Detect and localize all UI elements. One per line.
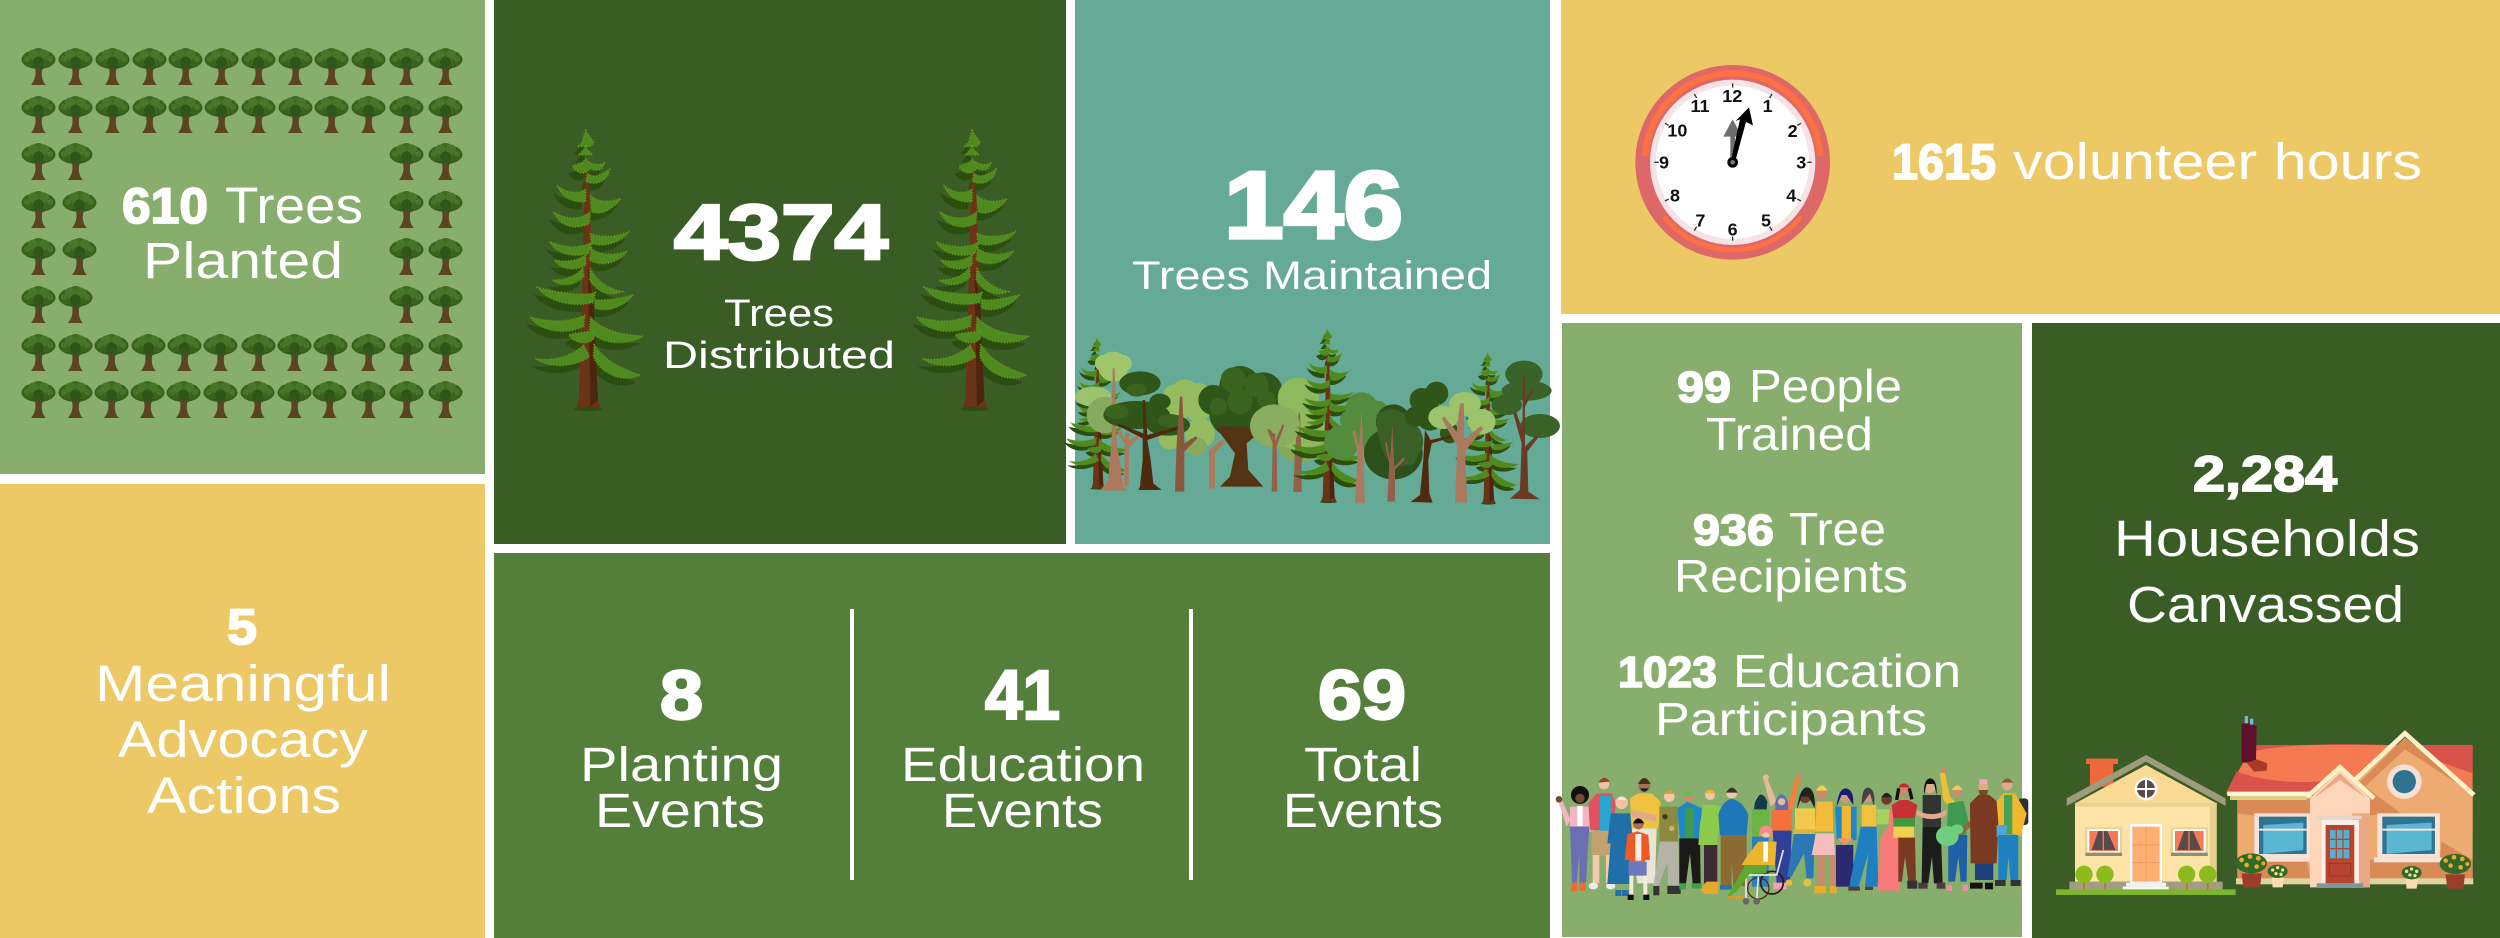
stat: 8 planting events: Planting: [580, 739, 783, 792]
text: 1615 volunteer hours: [1892, 133, 2422, 190]
text: 146 Trees Maintained: 146: [1224, 152, 1403, 259]
text: 2,284 Households Canvassed: 2,284: [2193, 446, 2337, 502]
text: 5 Meaningful Advocacy Actions: Meaningful: [95, 655, 391, 712]
icon: small yellow house: [2056, 755, 2236, 895]
text: 146 Trees Maintained: [1132, 152, 1492, 298]
icon: wall clock: 5: [1761, 210, 1771, 230]
illustration: two houses: [2056, 716, 2474, 895]
text: 2,284 Households Canvassed: [2114, 446, 2420, 633]
icon: wall clock: 4: [1786, 186, 1796, 206]
stat: 69 total events: Events: [1283, 785, 1443, 838]
icon: wall clock: 6: [1728, 219, 1738, 239]
icon: wall clock: [1635, 65, 1830, 260]
stat: 1023 education participants: [1618, 645, 1961, 745]
text: 5 Meaningful Advocacy Actions: Actions: [147, 767, 341, 824]
text: 610 Trees Planted: Planted: [143, 232, 343, 289]
stat: 69 total events: [1283, 656, 1443, 838]
stat: 99 people trained: People: [1749, 360, 1902, 412]
stat: 1023 education participants: Education: [1733, 645, 1961, 697]
stat: 936 tree recipients: [1674, 503, 1908, 602]
stat: 936 tree recipients: Tree: [1789, 503, 1886, 555]
text: 2,284 Households Canvassed: Households: [2114, 510, 2420, 567]
icon: wall clock: 7: [1695, 210, 1705, 230]
icon: wall clock: 8: [1670, 186, 1680, 206]
icon: right pine tree: [913, 131, 1030, 411]
panel: 610 trees planted: [0, 0, 485, 474]
stat: 69 total events: Total: [1304, 739, 1422, 792]
stat: 99 people trained: 99: [1677, 363, 1731, 412]
icon: wall clock: 10: [1667, 121, 1687, 141]
icon: left pine tree: [526, 131, 643, 411]
stat: 8 planting events: 8: [660, 656, 703, 734]
stat: 69 total events: 69: [1318, 656, 1406, 734]
text: 5 Meaningful Advocacy Actions: Advocacy: [118, 711, 369, 768]
panel: 146 trees maintained: [1065, 0, 1560, 544]
icon: wall clock: 2: [1788, 121, 1798, 141]
panel: 2,284 households canvassed: [2032, 323, 2500, 938]
text: 4374 Trees Distributed: Distributed: [663, 335, 895, 377]
panel: people: [1556, 323, 2028, 937]
panel: 1615 volunteer hours: [1561, 0, 2500, 314]
icon: wall clock: 3: [1796, 152, 1806, 172]
stat: 41 education events: 41: [985, 656, 1060, 734]
stat: 99 people trained: [1677, 360, 1902, 460]
text: 610 Trees Planted: 610: [122, 178, 208, 234]
icon: wall clock: 9: [1659, 152, 1669, 172]
icon: wall clock: 11: [1690, 96, 1709, 116]
text: 610 Trees Planted: Trees: [225, 177, 363, 234]
stat: 8 planting events: [580, 656, 783, 838]
illustration: forest row: [1065, 329, 1560, 505]
icon: wall clock: 1: [1763, 96, 1773, 116]
stat: 99 people trained: Trained: [1706, 408, 1873, 460]
text: 5 Meaningful Advocacy Actions: [95, 599, 391, 824]
text: 2,284 Households Canvassed: Canvassed: [2127, 576, 2404, 633]
icon: orange house with red roof: [2227, 716, 2474, 889]
panel: 4374 trees distributed: [494, 0, 1066, 544]
panel: 5 meaningful advocacy actions: [0, 484, 485, 938]
stat: 936 tree recipients: Recipients: [1674, 550, 1908, 602]
icon: wall clock: 12: [1722, 86, 1742, 106]
stat: 41 education events: [901, 656, 1145, 838]
text: 4374 Trees Distributed: Trees: [724, 293, 834, 335]
text: 4374 Trees Distributed: 4374: [674, 188, 888, 276]
stat: 1023 education participants: Participants: [1655, 693, 1927, 745]
text: 5 Meaningful Advocacy Actions: 5: [227, 599, 257, 655]
text: 1615 volunteer hours: volunteer hours: [2013, 133, 2422, 190]
icon grid: rows of oak trees: [22, 48, 462, 418]
text: 1615 volunteer hours: 1615: [1892, 134, 1996, 190]
stat: 936 tree recipients: 936: [1693, 506, 1774, 555]
stat: 8 planting events: Events: [595, 785, 765, 838]
panel: events: [494, 553, 1550, 938]
stat: 1023 education participants: 1023: [1618, 648, 1717, 697]
text: 610 Trees Planted: [122, 177, 363, 289]
text: 4374 Trees Distributed: [663, 188, 895, 377]
text: 146 Trees Maintained: Trees Maintained: [1132, 254, 1492, 298]
stat: 41 education events: Events: [942, 785, 1103, 838]
stat: 41 education events: Education: [901, 739, 1145, 792]
illustration: diverse crowd: [1556, 767, 2028, 905]
